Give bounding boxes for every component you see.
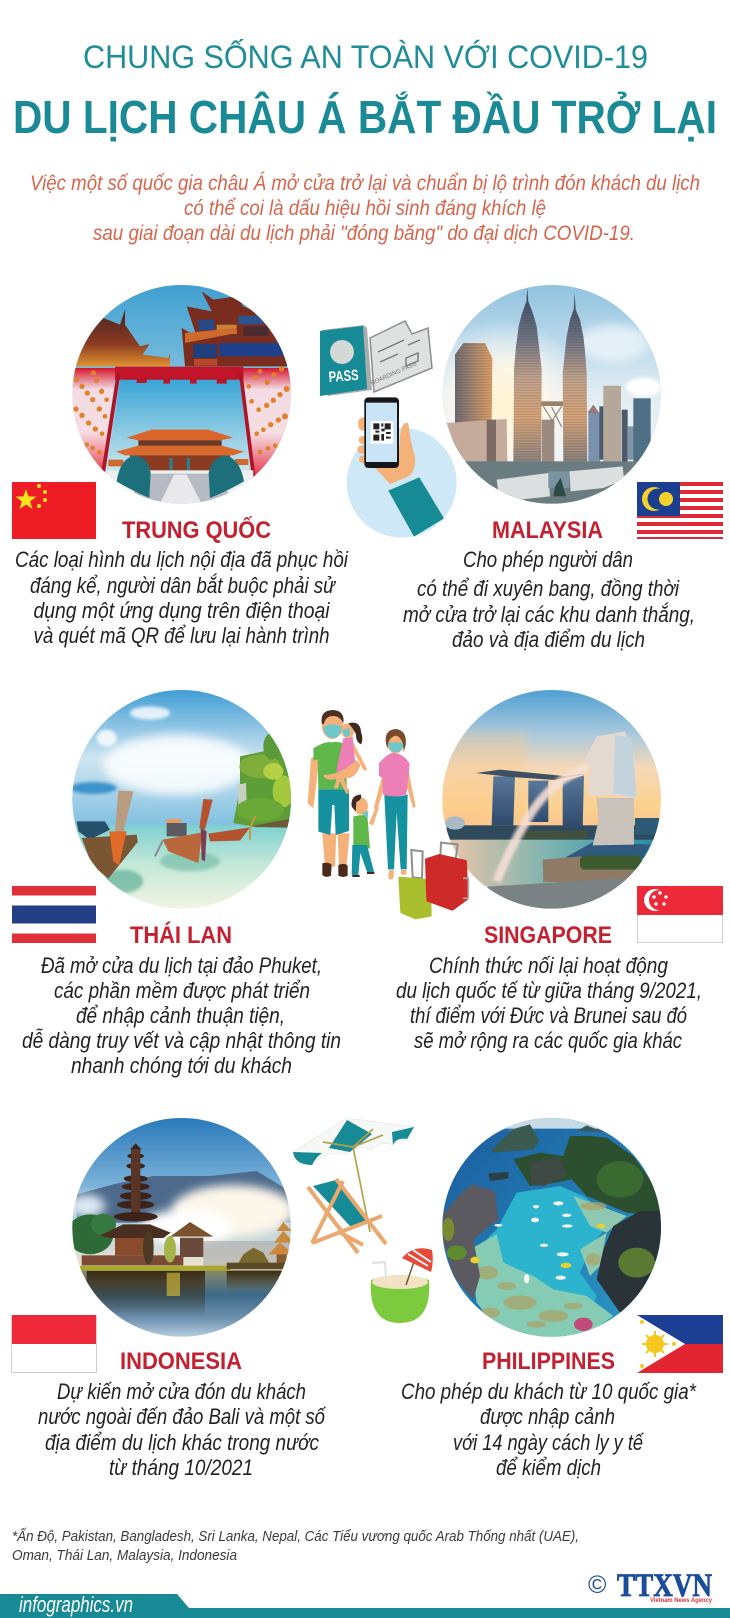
description: Chính thức nối lại hoạt động bbox=[429, 953, 669, 978]
description: để kiểm dịch bbox=[496, 1455, 601, 1480]
illustration: beach umbrella and deck chair bbox=[293, 1118, 414, 1253]
footnote bbox=[12, 1527, 579, 1564]
illustration: passport and boarding passes bbox=[320, 321, 432, 396]
description: để nhập cảnh thuận tiện, bbox=[76, 1003, 285, 1028]
footer bar: infographics.vn bbox=[19, 1592, 133, 1617]
panel: Trung Quốc bbox=[12, 283, 349, 648]
description: và quét mã QR để lưu lại hành trình bbox=[34, 623, 330, 648]
description: có thể đi xuyên bang, đồng thời bbox=[417, 576, 680, 601]
description: dễ dàng truy vết và cập nhật thông tin bbox=[22, 1028, 341, 1053]
description bbox=[38, 1379, 326, 1480]
intro paragraph: có thể coi là dấu hiệu hồi sinh đáng khích lệ bbox=[184, 197, 546, 220]
country name: SINGAPORE bbox=[484, 922, 612, 949]
photo: Petronas towers bbox=[442, 285, 661, 504]
country name: MALAYSIA bbox=[492, 517, 603, 544]
description bbox=[401, 1379, 697, 1480]
description: địa điểm du lịch khác trong nước bbox=[45, 1430, 319, 1455]
photo: Merlion and Marina Bay Sands bbox=[440, 688, 664, 912]
photo: long-tail boats at Phuket bbox=[70, 688, 294, 912]
description bbox=[396, 953, 702, 1053]
heading: subtitle: CHUNG SỐNG AN TOÀN VỚI COVID-19 bbox=[83, 39, 648, 75]
logo: TTXVN: TTXVN bbox=[617, 1568, 712, 1604]
flag: Malaysia bbox=[637, 482, 723, 539]
description: từ tháng 10/2021 bbox=[109, 1455, 253, 1480]
country name: PHILIPPINES bbox=[482, 1348, 615, 1375]
illustration: family with masks and luggage bbox=[308, 710, 468, 918]
description: đảo và địa điểm du lịch bbox=[452, 627, 645, 652]
country name: TRUNG QUỐC bbox=[122, 516, 271, 544]
description bbox=[403, 547, 695, 652]
description: dụng một ứng dụng trên điện thoại bbox=[34, 598, 330, 623]
flag: Indonesia bbox=[12, 1315, 96, 1372]
flag: China bbox=[12, 482, 96, 539]
country name: THÁI LAN bbox=[130, 921, 232, 949]
panel: Thái Lan bbox=[12, 688, 341, 1078]
description: Đã mở cửa du lịch tại đảo Phuket, bbox=[41, 953, 322, 978]
description: Các loại hình du lịch nội địa đã phục hồi bbox=[15, 547, 349, 572]
description: sẽ mở rộng ra các quốc gia khác bbox=[414, 1028, 682, 1053]
description bbox=[22, 953, 341, 1078]
description bbox=[15, 547, 349, 648]
description: được nhập cảnh bbox=[480, 1404, 615, 1429]
panel: Singapore bbox=[396, 688, 723, 1053]
flag: Thailand bbox=[12, 886, 96, 943]
description: đáng kể, người dân bắt buộc phải sử bbox=[30, 573, 337, 598]
footnote: Oman, Thái Lan, Malaysia, Indonesia bbox=[12, 1547, 237, 1564]
illustration: coconut drink bbox=[371, 1248, 433, 1323]
photo: China palace gate bbox=[70, 283, 294, 507]
panel: Indonesia bbox=[12, 1116, 326, 1480]
photo: Bali water temple bbox=[67, 1116, 295, 1340]
flag: Singapore bbox=[637, 886, 723, 942]
description: Cho phép người dân bbox=[463, 547, 633, 572]
intro paragraph: sau giai đoạn dài du lịch phải "đóng băng" do đại dịch COVID-19. bbox=[93, 222, 635, 245]
panel: Malaysia bbox=[403, 283, 723, 652]
footer bar bbox=[0, 1592, 730, 1618]
illustration: hand holding phone with QR code bbox=[347, 397, 457, 538]
logo: TTXVN bbox=[588, 1568, 712, 1604]
footnote: *Ấn Độ, Pakistan, Bangladesh, Sri Lanka, Nepal, Các Tiểu vương quốc Arab Thống nhất (UAE), bbox=[12, 1527, 579, 1545]
logo: TTXVN: Vietnam News Agency bbox=[650, 1597, 712, 1604]
description: với 14 ngày cách ly y tế bbox=[453, 1430, 644, 1455]
description: nước ngoài đến đảo Bali và một số bbox=[38, 1404, 326, 1429]
flag: Philippines bbox=[637, 1315, 723, 1373]
intro paragraph bbox=[30, 172, 700, 245]
description: các phần mềm được phát triển bbox=[54, 978, 310, 1003]
photo: El Nido lagoon bbox=[440, 1116, 664, 1340]
logo: TTXVN: © bbox=[588, 1571, 607, 1599]
panel: Philippines bbox=[401, 1116, 723, 1480]
illustration: passport and boarding passes: BOARDING PASS bbox=[370, 361, 418, 387]
description: nhanh chóng tới du khách bbox=[71, 1053, 292, 1078]
illustration: passport and boarding passes: PASS bbox=[328, 367, 359, 386]
description: Dự kiến mở cửa đón du khách bbox=[57, 1379, 306, 1404]
country name: INDONESIA bbox=[120, 1348, 242, 1375]
